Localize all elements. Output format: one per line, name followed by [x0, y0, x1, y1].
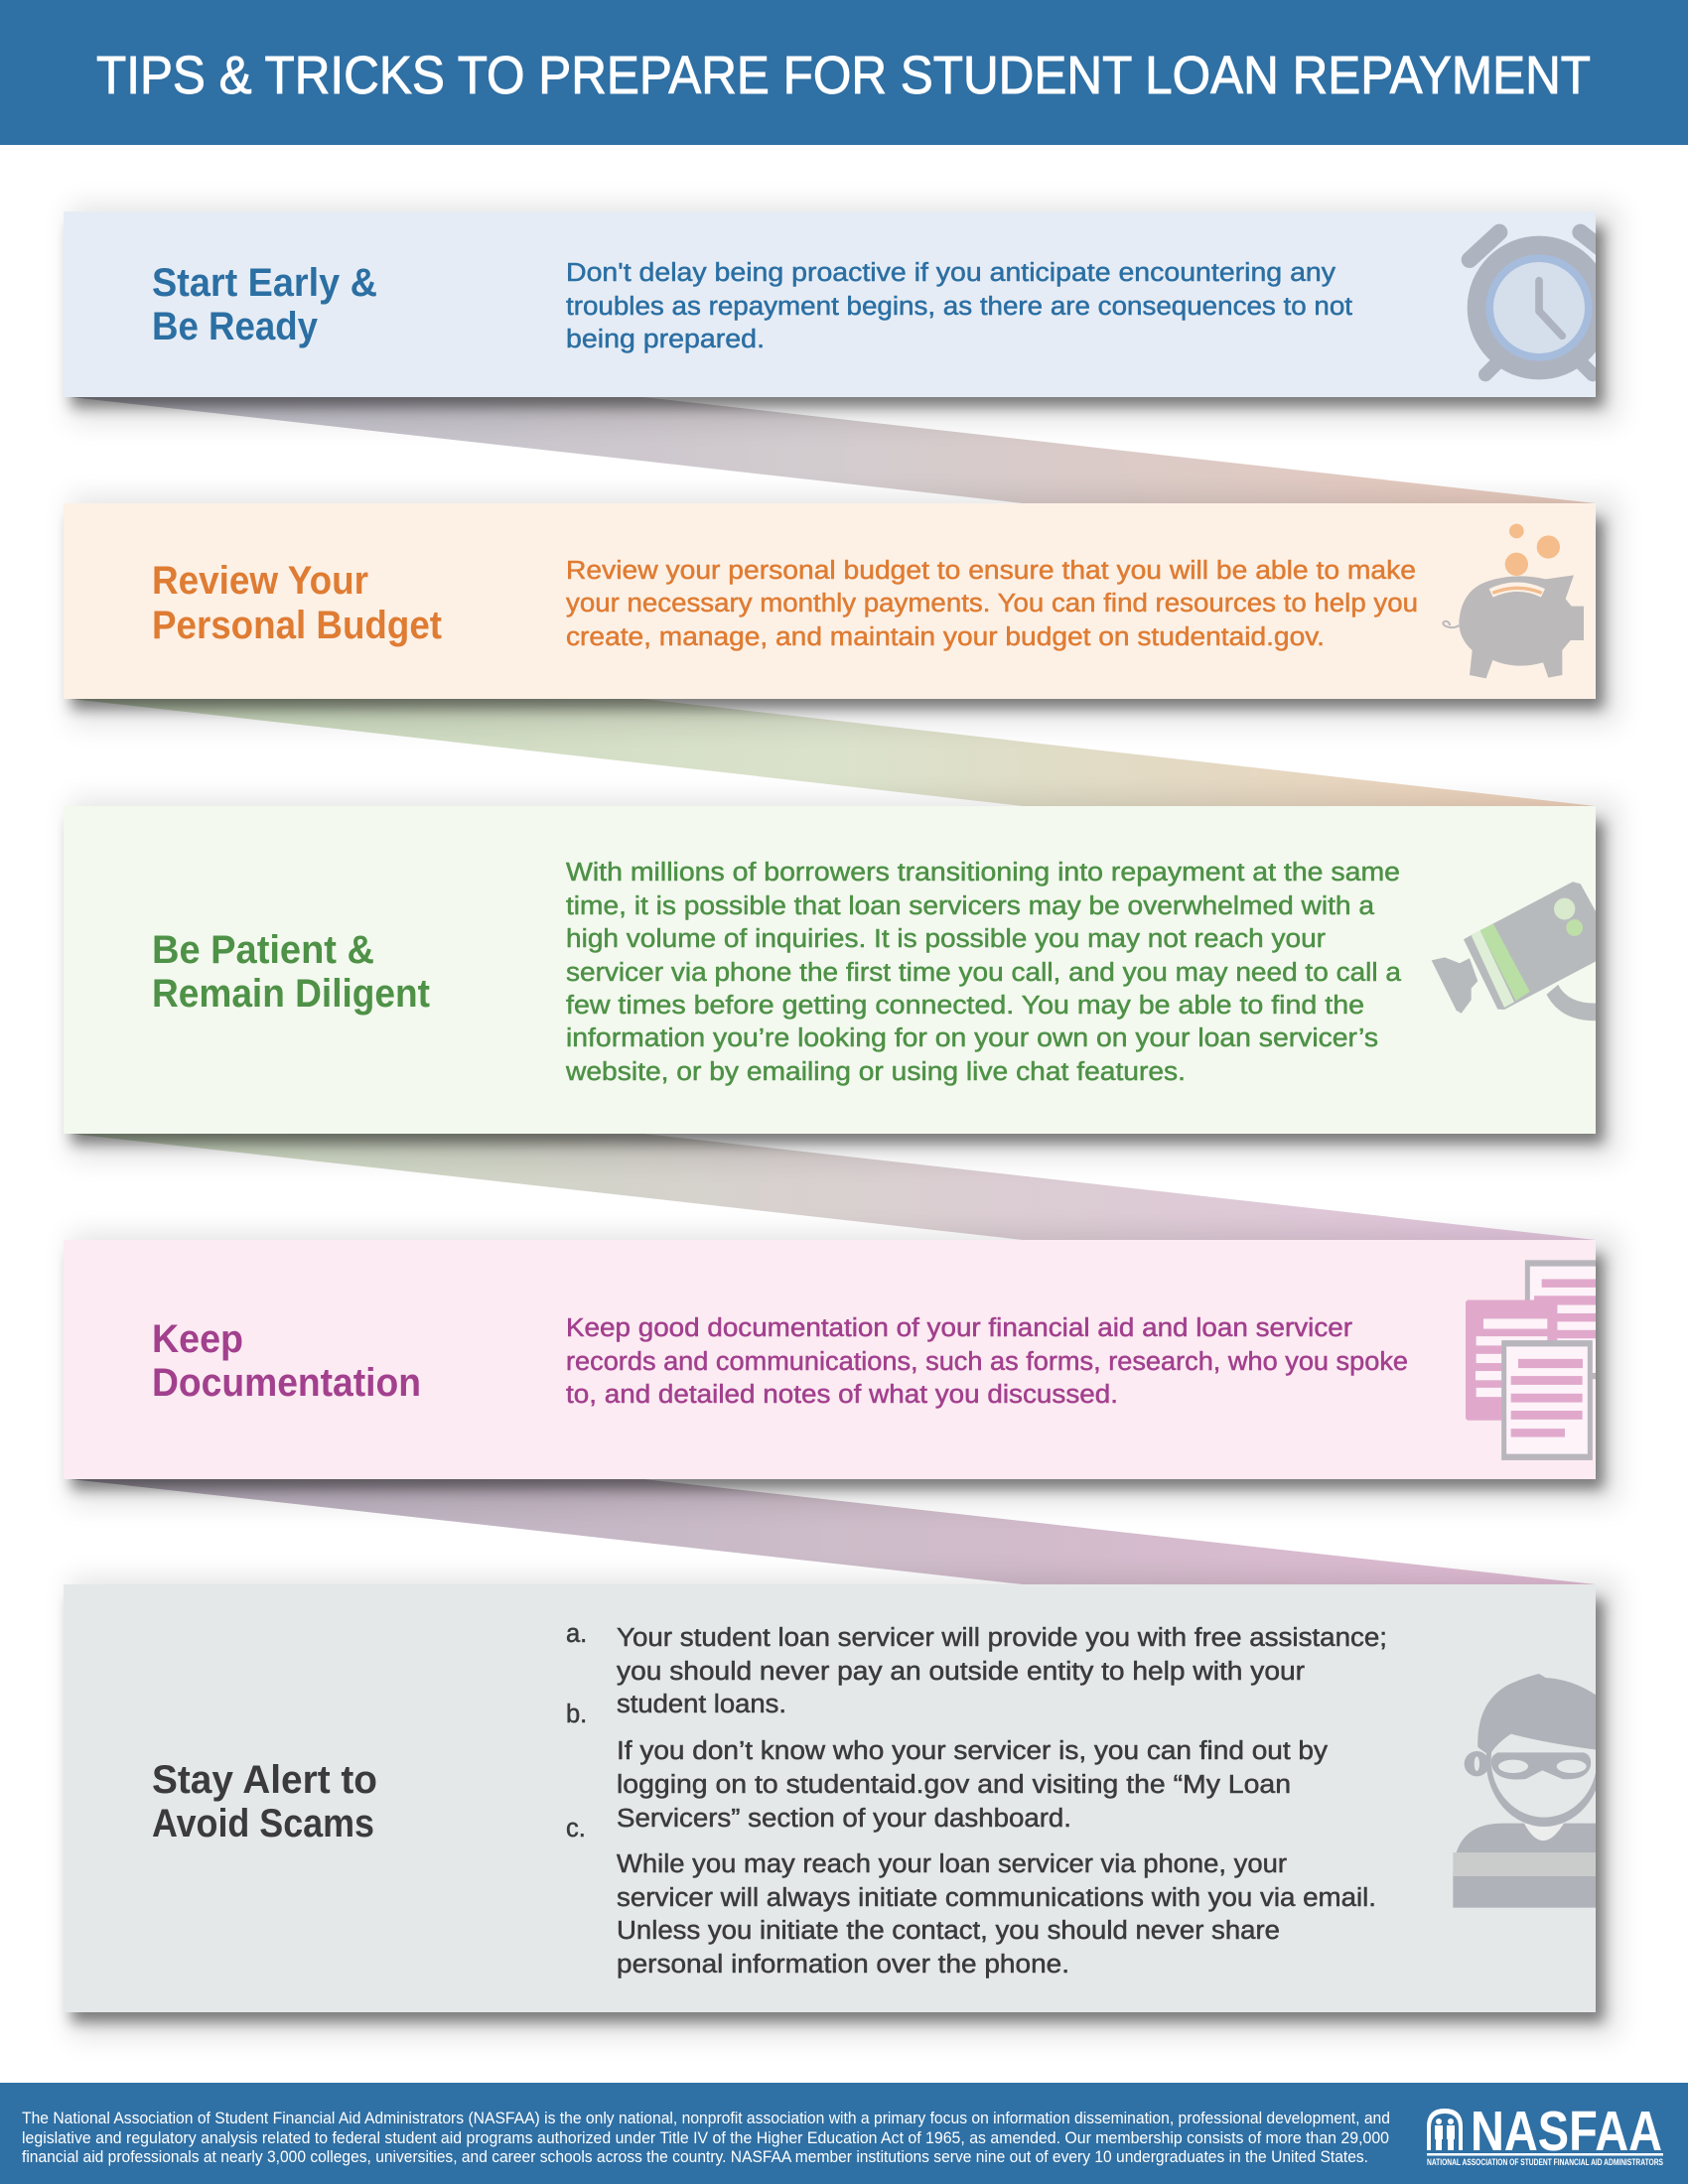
list markers [566, 1620, 587, 1843]
list item c: servicer will always initiate communications with you via email. [617, 1884, 1376, 1912]
body text: start early: Don't delay being proactive if you anticipate encountering any [566, 259, 1336, 287]
heading: be patient: Be Patient & [152, 928, 374, 972]
icon: security camera [1432, 882, 1602, 1014]
footer text: legislative and regulatory analysis related to federal student aid programs authorized under Title IV of the Higher Education Act of 1965, as amended. Our membership consists of more than 29,000 [22, 2129, 1389, 2147]
heading: be patient [152, 928, 430, 1016]
list item b: logging on to studentaid.gov and visiting the “My Loan [617, 1771, 1291, 1799]
body text: start early [566, 259, 1352, 353]
panel: start early [64, 205, 1618, 422]
body text: be patient: information you’re looking for on your own on your loan servicer’s [566, 1024, 1378, 1052]
heading: stay alert [152, 1758, 377, 1845]
list markers: c. [566, 1815, 586, 1843]
heading: stay alert: Stay Alert to [152, 1758, 377, 1802]
body text: keep documentation [566, 1314, 1408, 1409]
icon: documents [1466, 1263, 1614, 1457]
heading: start early: Be Ready [152, 305, 319, 348]
heading: review budget: Personal Budget [152, 604, 442, 647]
list item c: Unless you initiate the contact, you should never share [617, 1917, 1280, 1945]
heading: review budget: Review Your [152, 559, 368, 603]
body text: keep documentation: records and communications, such as forms, research, who you spoke [566, 1348, 1408, 1376]
heading: review budget [152, 559, 442, 647]
list item b [617, 1737, 1328, 1833]
list item c: While you may reach your loan servicer via phone, your [617, 1850, 1288, 1878]
body text: start early: troubles as repayment begins, as there are consequences to not [566, 293, 1352, 321]
footer text: financial aid professionals at nearly 3,000 colleges, universities, and career schools across the country. NASFAA member institutions serve nine out of every 10 undergraduates in the United States. [22, 2148, 1368, 2166]
icon: alarm clock [1468, 232, 1611, 379]
list markers: a. [566, 1620, 587, 1648]
list item c [617, 1850, 1376, 1979]
panel: keep documentation [64, 1234, 1618, 1504]
heading: keep documentation [152, 1317, 421, 1405]
fold connector 3 [70, 1134, 1596, 1240]
panel: stay alert [64, 1578, 1618, 2037]
heading: start early [152, 261, 377, 348]
heading: keep documentation: Keep [152, 1317, 243, 1361]
panel: review budget [64, 497, 1618, 724]
footer text: The National Association of Student Financial Aid Administrators (NASFAA) is the only national, nonprofit association with a primary focus on information dissemination, professional development, and [22, 2110, 1390, 2127]
body text: be patient: With millions of borrowers transitioning into repayment at the same [566, 859, 1400, 887]
heading: start early: Start Early & [152, 261, 377, 305]
fold connector 4 [70, 1479, 1596, 1584]
list item b: Servicers” section of your dashboard. [617, 1805, 1071, 1833]
body text: review budget: your necessary monthly payments. You can find resources to help you [566, 590, 1418, 617]
fold connector 1 [70, 397, 1596, 503]
title: TIPS & TRICKS TO PREPARE FOR STUDENT LOAN REPAYMENT [96, 46, 1591, 105]
body text: be patient: servicer via phone the first time you call, and you may need to call a [566, 959, 1402, 987]
list item a: you should never pay an outside entity to help with your [617, 1658, 1306, 1686]
body text: be patient: time, it is possible that loan servicers may be overwhelmed with a [566, 892, 1375, 920]
heading: keep documentation: Documentation [152, 1361, 421, 1405]
body text: keep documentation: Keep good documentation of your financial aid and loan servicer [566, 1314, 1353, 1342]
list item c: personal information over the phone. [617, 1951, 1069, 1979]
icon: piggy bank [1443, 524, 1584, 678]
body text: start early: being prepared. [566, 326, 765, 353]
list item a: Your student loan servicer will provide you with free assistance; [617, 1624, 1387, 1652]
body text: be patient: high volume of inquiries. It is possible you may not reach your [566, 925, 1327, 953]
heading: stay alert: Avoid Scams [152, 1802, 374, 1845]
NASFAA logo [1427, 2100, 1663, 2167]
header banner [0, 0, 1688, 145]
list markers: b. [566, 1701, 587, 1728]
list item b: If you don’t know who your servicer is, you can find out by [617, 1737, 1328, 1765]
panel: be patient [64, 800, 1618, 1159]
fold connector 2 [70, 699, 1596, 806]
body text: be patient [565, 859, 1402, 1086]
body text: review budget [566, 557, 1418, 651]
list item a [617, 1624, 1387, 1718]
body text: be patient: few times before getting connected. You may be able to find the [566, 992, 1364, 1020]
heading: be patient: Remain Diligent [152, 972, 430, 1016]
body text: review budget: Review your personal budget to ensure that you will be able to make [566, 557, 1416, 585]
footer text [22, 2110, 1390, 2166]
body text: review budget: create, manage, and maintain your budget on studentaid.gov. [566, 623, 1325, 651]
body text: keep documentation: to, and detailed notes of what you discussed. [566, 1381, 1118, 1409]
icon: masked scammer [1453, 1674, 1602, 1908]
footer band [0, 2083, 1688, 2184]
list item a: student loans. [617, 1691, 786, 1718]
body text: be patient: website, or by emailing or using live chat features. [565, 1058, 1186, 1086]
